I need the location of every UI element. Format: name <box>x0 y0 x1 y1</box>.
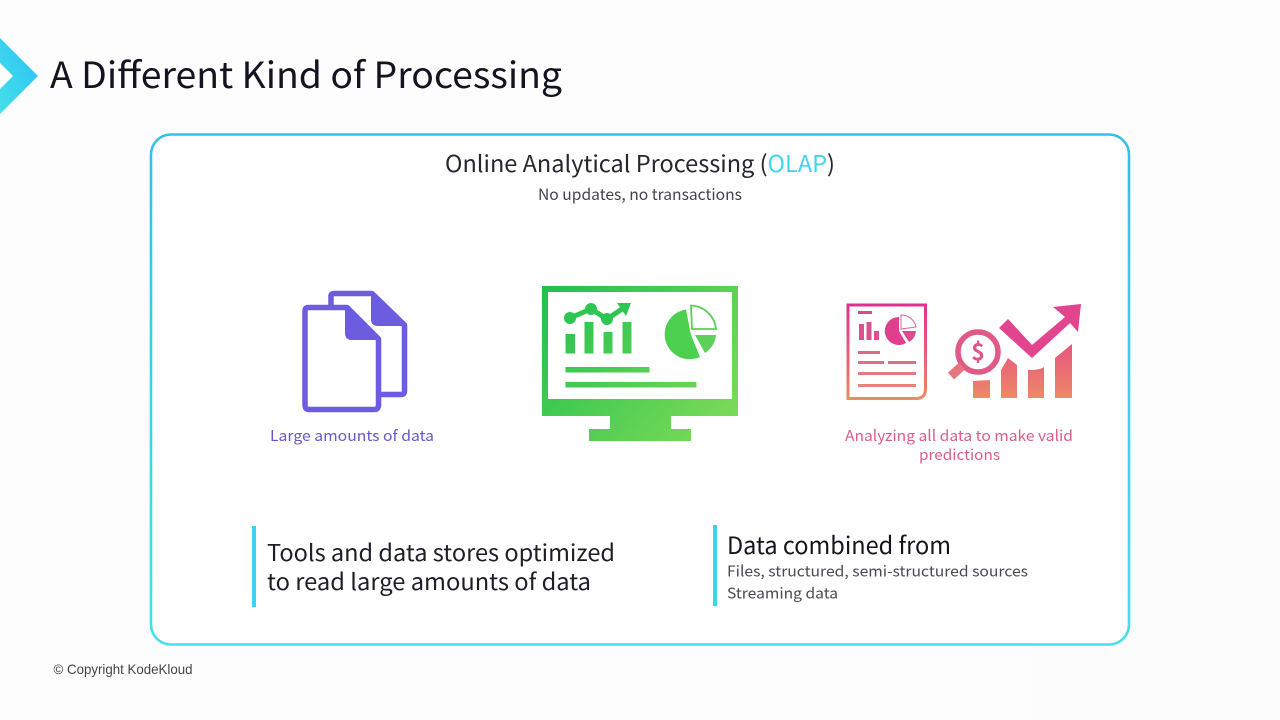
label: analyzing all data: predictions <box>919 444 1000 465</box>
panel subheading: No updates, no transactions <box>538 183 742 205</box>
icon: report and growth chart <box>848 304 1081 398</box>
label: analyzing all data: Analyzing all data to make valid <box>845 425 1073 446</box>
callout: tools and data stores: Tools and data stores optimized <box>267 534 615 568</box>
panel heading: Online Analytical Processing ( OLAP) <box>445 145 835 179</box>
callout: tools and data stores: to read large amounts of data <box>267 563 591 597</box>
bar chart <box>566 322 632 354</box>
callout: data combined from: Data combined from <box>727 526 951 561</box>
report document <box>848 305 926 398</box>
text lines <box>566 367 696 388</box>
panel: OLAP <box>151 134 1129 644</box>
title: A Different Kind of Processing <box>50 47 562 99</box>
copyright: © Copyright KodeKloud <box>54 661 192 677</box>
callout: data combined from: Streaming data <box>727 582 838 604</box>
callout: tools and data stores <box>252 526 615 607</box>
label: analyzing all data <box>845 425 1073 465</box>
magnifier with dollar: $ <box>971 333 985 367</box>
trend line <box>564 303 631 325</box>
callout: data combined from: Files, structured, semi-structured sources <box>727 560 1028 582</box>
icon: documents <box>305 292 406 410</box>
growth arrow <box>999 304 1081 358</box>
icon: monitor dashboard <box>542 286 738 441</box>
logo chevron <box>0 38 38 114</box>
callout: data combined from <box>713 525 1028 606</box>
label: large amounts of data: Large amounts of data <box>270 425 434 446</box>
magnifier with dollar <box>951 332 998 376</box>
pie chart <box>665 306 716 359</box>
growth bars <box>973 344 1072 398</box>
